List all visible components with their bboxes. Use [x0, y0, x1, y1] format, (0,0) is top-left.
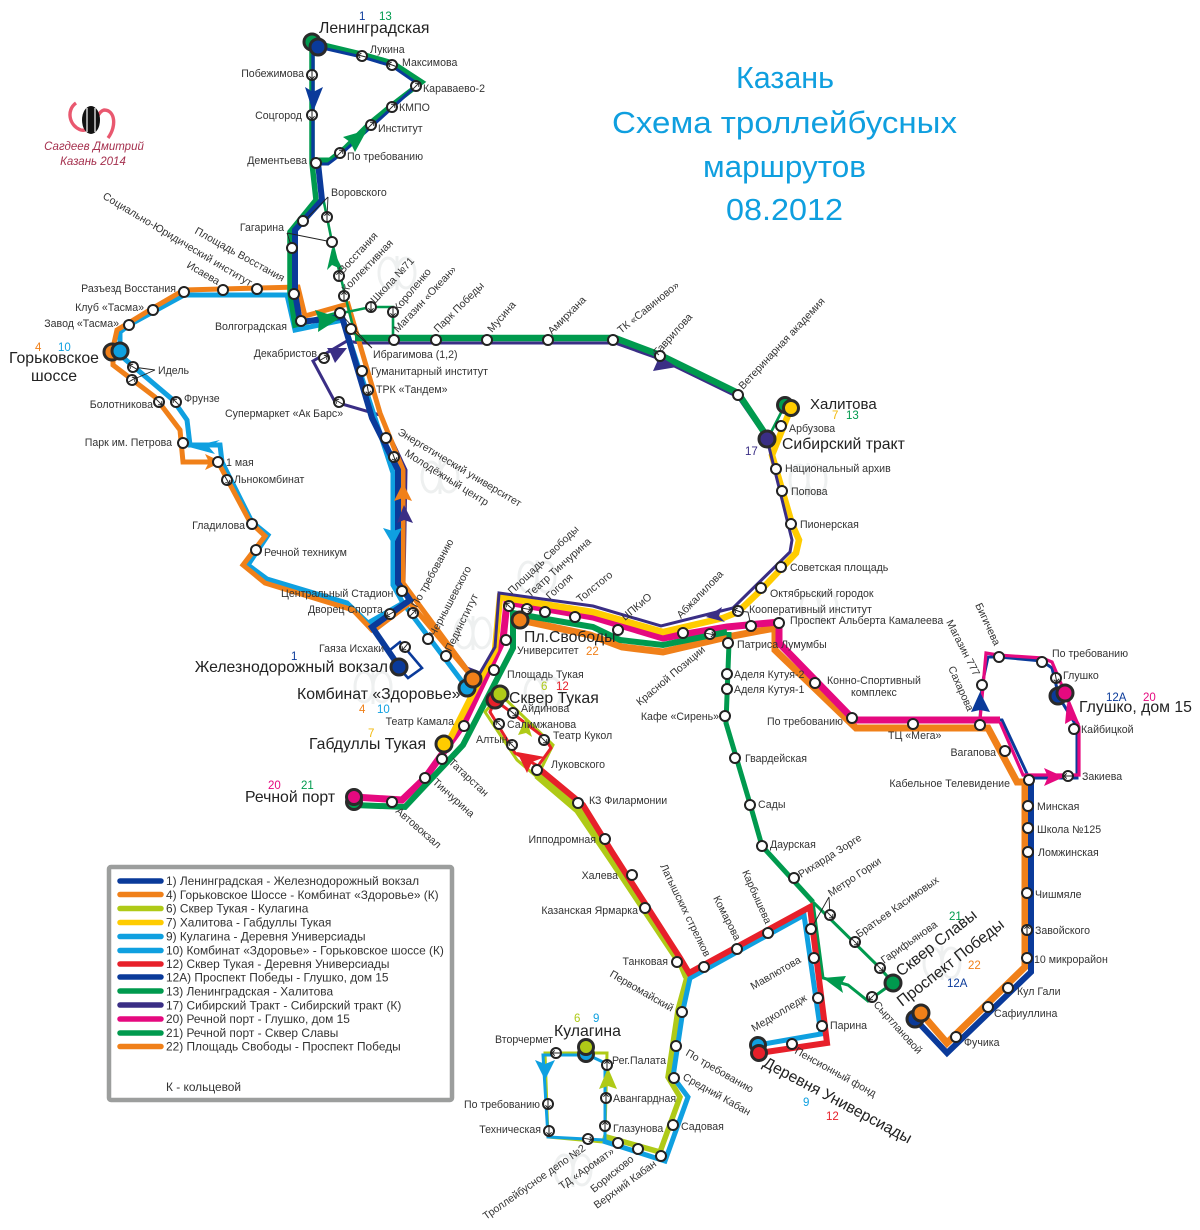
- station labels: north: Площадь Восстания: [193, 225, 286, 284]
- station labels: south: Троллейбусное депо №2: [481, 1142, 588, 1222]
- station labels: south: Глазунова: [613, 1123, 663, 1135]
- station labels: centre: Латышских стрелков: [657, 862, 713, 959]
- station labels: north: Школа №71: [368, 255, 417, 306]
- legend entries: 6) Сквер Тукая - Кулагина: [166, 902, 309, 916]
- station labels: east: Арбузова: [789, 423, 835, 435]
- station labels: south: Рег.Палата: [612, 1055, 666, 1067]
- station labels: east: Пионерская: [800, 519, 859, 531]
- arrow: route 12: [517, 752, 545, 773]
- station labels: north: Дементьева: [247, 155, 307, 167]
- station labels: east: Проспект Альберта Камалеева: [790, 615, 943, 627]
- legend entries: 12А) Проспект Победы - Глушко, дом 15: [166, 970, 389, 984]
- route 20: Речной порт - Глушко: [354, 602, 1079, 800]
- route 17: Сибирский тракт ring: [313, 341, 792, 673]
- route 7: Халитова - Габдуллы Тукая: [444, 408, 799, 744]
- station labels: north: Соцгород: [255, 110, 302, 122]
- terminus label: Халитова: Халитова: [810, 396, 877, 413]
- route 12A: Проспект Победы - Глушко: [915, 657, 1077, 1053]
- station labels: north: Побежимова: [241, 68, 304, 80]
- station labels: east: Сахарова: [945, 664, 976, 713]
- terminus label: Кулагина: 9: [593, 1013, 599, 1025]
- terminus label: Глушко, дом 15: 12А: [1106, 692, 1127, 704]
- station labels: north: [44, 44, 828, 420]
- terminus label: Глушко, дом 15: Глушко, дом 15: [1079, 699, 1192, 716]
- station labels: south-east: Парина: [830, 1020, 867, 1032]
- station labels: east: Минская: [1037, 801, 1079, 813]
- station labels: west: Болотникова: [90, 399, 153, 411]
- station labels: centre: Ипподромная: [529, 834, 596, 846]
- station labels: east: Кул Гали: [1017, 986, 1061, 998]
- station labels: east: Бигичева: [972, 601, 1002, 648]
- station labels: east: Кооперативный институт: [749, 604, 872, 616]
- terminus label: Горьковское шоссе: [9, 342, 99, 385]
- station labels: west: Пединститут: [443, 592, 481, 653]
- route 10: Комбинат Здоровье - Горьковское шоссе: [120, 295, 467, 688]
- terminus label: Пл.Свободы: Пл.Свободы: [524, 629, 615, 646]
- terminus label: Кулагина: [554, 1013, 621, 1040]
- station labels: centre: Театр Тинчурина: [524, 536, 594, 600]
- station labels: east: Школа №125: [1037, 824, 1101, 836]
- station labels: north: Ветеринарная академия: [736, 296, 828, 392]
- arrow: route 17 west: [706, 607, 725, 622]
- station labels: north: Максимова: [402, 57, 457, 69]
- station labels: east: Национальный архив: [785, 463, 891, 475]
- terminus label: Ленинградская: 1: [359, 11, 365, 23]
- station labels: east: Октябрьский городок: [770, 588, 874, 600]
- plain stops: [124, 158, 1079, 1161]
- terminus label: Железнодорожный вокзал: 1: [291, 651, 297, 663]
- legend entries: 10) Комбинат «Здоровье» - Горьковское шоссе (К): [166, 944, 444, 958]
- station labels: west: 1 мая: [226, 457, 254, 469]
- route 6: Сквер Тукая - Кулагина: [485, 694, 687, 1152]
- arrow: route 21: [823, 976, 846, 993]
- arrow: route 1 south: [305, 87, 323, 112]
- terminus label: Сквер Славы: Сквер Славы: [893, 907, 980, 980]
- station labels: centre: Площадь Свободы: [506, 523, 581, 597]
- station labels: west: Энергетический университет: [395, 426, 523, 510]
- station labels: west: Льнокомбинат: [234, 474, 305, 486]
- terminus label: Проспект Победы: 22: [968, 960, 981, 972]
- legend entries: 9) Кулагина - Деревня Универсиады: [166, 930, 366, 944]
- station labels: north: Исаева: [184, 259, 222, 288]
- station labels: east: Закиева: [1082, 771, 1122, 783]
- station labels: east: 10 микрорайон: [1034, 954, 1108, 966]
- terminus label: Сквер Тукая: 6: [541, 681, 547, 693]
- station labels: centre: Луковского: [551, 759, 605, 771]
- station labels: east: Чишмяле: [1035, 889, 1082, 901]
- station labels: east: Аделя Кутуя-2: [734, 669, 805, 681]
- station labels: north: Завод «Тасма»: [44, 318, 119, 330]
- station labels: south: Первомайский: [608, 968, 676, 1014]
- station labels: north: Институт: [378, 123, 423, 135]
- station labels: east: Попова: [791, 486, 828, 498]
- terminus label: Сквер Славы: 21: [949, 911, 962, 923]
- arrow: route 4 south: [394, 483, 412, 501]
- station labels: east: Вагапова: [950, 747, 996, 759]
- legend entries: К - кольцевой: [166, 1080, 241, 1094]
- title: Казань: [736, 60, 834, 95]
- terminus markers: [104, 34, 1073, 1062]
- terminus label: Проспект Победы: 12А: [947, 978, 968, 990]
- terminus label: Пл.Свободы: [524, 629, 615, 658]
- terminus label: Пл.Свободы: 22: [586, 646, 599, 658]
- terminus label: Габдуллы Тукая: 7: [368, 728, 374, 740]
- station labels: east: Патриса Лумумбы: [737, 639, 827, 651]
- route 4: Горьковское шоссе - Комбинат Здоровье: [112, 287, 473, 678]
- terminus label: Ленинградская: [319, 11, 429, 37]
- station labels: north: Супермаркет «Ак Барс»: [225, 408, 343, 420]
- terminus label: Речной порт: [245, 780, 335, 806]
- station labels: centre: Абжалилова: [675, 568, 726, 621]
- station labels: west: Центральный Стадион: [281, 588, 394, 600]
- station labels: south: Вторчермет: [495, 1034, 553, 1046]
- station labels: north: Гагарина: [240, 222, 284, 234]
- station labels: east: Кабельное Телевидение: [889, 778, 1010, 790]
- watermarks: [355, 256, 960, 1187]
- station labels: south-east: Пенсионный фонд: [793, 1045, 878, 1100]
- route 9: Кулагина - Деревня Универсиады: [543, 915, 821, 1161]
- terminus label: Железнодорожный вокзал: Железнодорожный вокзал: [195, 659, 388, 676]
- station labels: west: Чернышевского: [427, 564, 474, 638]
- station labels: north: По требованию: [347, 151, 423, 163]
- station labels: centre: Карбышева: [739, 868, 774, 926]
- terminus label: Ленинградская: 13: [379, 11, 392, 23]
- arrow: route 20 north: [1065, 703, 1080, 724]
- title: [612, 60, 958, 227]
- terminus label: Горьковское шоссе: 4: [35, 342, 42, 354]
- station labels: west: [85, 365, 523, 851]
- terminus label: Халитова: [810, 396, 877, 422]
- arrow: route 6: [518, 718, 532, 737]
- station labels: west: По требованию: [409, 537, 457, 609]
- terminus label: Деревня Универсиады: Деревня Универсиады: [760, 1055, 915, 1147]
- station labels: south-east: Медколледж: [749, 992, 810, 1035]
- arrow: route 17 north: [397, 505, 413, 523]
- station labels: east: ТЦ «Мега»: [888, 730, 942, 742]
- station labels: centre: КЗ Филармонии: [589, 795, 667, 807]
- station labels: north: Коллективная: [340, 237, 396, 295]
- station labels: east: Сафиуллина: [994, 1008, 1057, 1020]
- station labels: south: Борисково: [588, 1153, 636, 1195]
- station labels: north: Ибрагимова (1,2): [373, 349, 458, 361]
- terminus label: Железнодорожный вокзал: [195, 651, 388, 676]
- station labels: north: Караваево-2: [423, 83, 485, 95]
- arrow: route 6 north: [599, 1068, 617, 1089]
- legend entries: 1) Ленинградская - Железнодорожный вокзал: [166, 874, 419, 888]
- legend panel: [109, 867, 452, 1100]
- legend entries: 13) Ленинградская - Халитова: [166, 984, 333, 998]
- direction arrows: [189, 87, 1080, 1089]
- station labels: west: Тинчурина: [430, 776, 477, 820]
- arrow: route 12A north: [971, 692, 990, 712]
- terminus label: Речной порт: 21: [301, 780, 314, 792]
- station labels: south-east: [748, 832, 942, 1100]
- legend entries: 21) Речной порт - Сквер Славы: [166, 1026, 338, 1040]
- terminus label: Горьковское шоссе: 10: [58, 342, 71, 354]
- legend entries: 20) Речной порт - Глушко, дом 15: [166, 1012, 350, 1026]
- logo and author signature: [44, 103, 144, 168]
- terminus label: Комбинат Здоровье: Комбинат «Здоровье»: [297, 686, 461, 703]
- legend entries: 22) Площадь Свободы - Проспект Победы: [166, 1040, 401, 1054]
- station labels: centre: Казанская Ярмарка: [541, 905, 638, 917]
- terminus label: Габдуллы Тукая: Габдуллы Тукая: [309, 736, 426, 753]
- station labels: west: Гладилова: [192, 520, 245, 532]
- station labels: south: Авангардная: [613, 1093, 676, 1105]
- station labels: east: [641, 423, 1134, 1049]
- station labels: east: Фучика: [964, 1037, 1000, 1049]
- terminus label: Деревня Универсиады: 12: [826, 1111, 839, 1123]
- station labels: north: Амирхана: [546, 294, 589, 337]
- title: Схема троллейбусных: [612, 105, 958, 140]
- station labels: west: Речной техникум: [264, 547, 347, 559]
- legend entries: 12) Сквер Тукая - Деревня Универсиады: [166, 957, 389, 971]
- station labels: south-east: Гарифьянова: [879, 919, 940, 966]
- arrow: route 13 north: [327, 248, 343, 270]
- station labels: north: Декабристов: [254, 348, 317, 360]
- station labels: south: [464, 968, 755, 1222]
- arrow: route 10 west: [189, 440, 220, 454]
- station labels: west: Парк им. Петрова: [85, 437, 172, 449]
- arrow: route 17 east: [653, 352, 677, 371]
- station labels: north: Парк Победы: [432, 280, 487, 335]
- station labels: west: Автовокзал: [393, 805, 443, 851]
- station labels: west: Фрунзе: [184, 393, 220, 405]
- station labels: west: Гаяза Исхаки: [319, 643, 384, 655]
- station labels: south: По требованию: [464, 1099, 540, 1111]
- station labels: centre: Площадь Тукая: [507, 669, 584, 681]
- route 1: Ленинградская - Железнодорожный вокзал: [295, 47, 422, 678]
- station labels: east: Гвардейская: [745, 753, 807, 765]
- station labels: east: комплекс: [851, 687, 897, 699]
- terminus label: Проспект Победы: Проспект Победы: [894, 916, 1008, 1010]
- station labels: centre: Гоголя: [544, 571, 576, 602]
- terminus label: Горьковское шоссе: шоссе: [31, 368, 77, 385]
- station labels: west: Молодёжный центр: [402, 447, 491, 509]
- terminus label: Речной порт: 20: [268, 780, 281, 792]
- terminus label: Сибирский тракт: Сибирский тракт: [782, 436, 905, 453]
- station labels: north: Социально-Юридический институт: [100, 190, 254, 289]
- station labels: south-east: Метро Горки: [826, 855, 884, 899]
- station labels: east: Советская площадь: [790, 562, 889, 574]
- terminus label: Сибирский тракт: 17: [745, 446, 758, 458]
- station labels: south: Садовая: [681, 1121, 724, 1133]
- station labels: west: Дворец Спорта: [308, 604, 383, 616]
- station labels: east: Конно-Спортивный: [827, 675, 921, 687]
- station labels: south: Верхний Кабан: [592, 1158, 659, 1211]
- station labels: east: Завойского: [1035, 925, 1090, 937]
- terminus label: Комбинат Здоровье: 10: [377, 704, 390, 716]
- arrow: route 10 south: [383, 528, 402, 545]
- terminus label: Сибирский тракт: [745, 436, 905, 458]
- station labels: north: Магазин «Океан»: [391, 264, 459, 335]
- terminus label: Комбинат Здоровье: [297, 686, 461, 716]
- terminus label: Кулагина: 6: [574, 1013, 580, 1025]
- station labels: north: Гуманитарный институт: [371, 366, 488, 378]
- terminus label: Комбинат Здоровье: 4: [359, 704, 366, 716]
- station labels: centre: Толстого: [574, 569, 615, 605]
- station labels: east: Глушко: [1063, 670, 1099, 682]
- arrow: route 17: [327, 348, 347, 363]
- title: маршрутов: [703, 149, 866, 184]
- terminus label: Ленинградская: Ленинградская: [319, 20, 429, 37]
- arrow: route 13 north-east: [343, 130, 367, 152]
- stop leader lines: [132, 197, 830, 929]
- terminus label: Халитова: 13: [846, 410, 859, 422]
- station labels: west: Театр Камала: [386, 716, 454, 728]
- route 21: Речной порт - Сквер Славы: [354, 613, 893, 1001]
- station labels: centre: [476, 523, 774, 968]
- one-way stops with direction marks: [125, 50, 1073, 1145]
- arrow: route 20 east: [1044, 768, 1064, 786]
- terminus label: Горьковское шоссе: Горьковское: [9, 350, 99, 367]
- route 22: Площадь Свободы - Проспект Победы: [520, 620, 1025, 1043]
- station labels: centre: Комарова: [710, 894, 743, 943]
- legend swatches: [120, 881, 161, 1046]
- legend entries: 17) Сибирский Тракт - Сибирский тракт (К): [166, 998, 401, 1012]
- station labels: east: По требованию: [1052, 648, 1128, 660]
- station labels: centre: Танковая: [622, 956, 668, 968]
- station labels: centre: Красной Позиции: [634, 644, 708, 708]
- terminus label: Халитова: 7: [832, 410, 838, 422]
- station labels: east: Кайбицкой: [1081, 724, 1134, 736]
- station labels: south: По требованию: [684, 1047, 755, 1096]
- terminus label: Сквер Тукая: 12: [556, 681, 569, 693]
- arrow: route 13 east at Волгоградская: [315, 310, 340, 332]
- station labels: east: Магазин 777: [943, 618, 982, 678]
- station labels: centre: ЦПКиО: [619, 591, 654, 623]
- station labels: south-east: Сыртлановой: [871, 999, 924, 1057]
- station labels: east: По требованию: [767, 716, 843, 728]
- station labels: south: ТД «Аромат»: [557, 1145, 617, 1192]
- station labels: north: Разъезд Восстания: [81, 283, 176, 295]
- station labels: north: Короленко: [391, 266, 434, 314]
- route 13: Ленинградская - Халитова: [290, 42, 785, 438]
- station labels: south: Техническая: [479, 1124, 541, 1136]
- route 12: Сквер Тукая - Деревня Универсиады: [490, 700, 827, 1053]
- terminus label: Габдуллы Тукая: [309, 728, 426, 753]
- station labels: south: Средний Кабан: [681, 1071, 753, 1118]
- terminus label: Деревня Универсиады: 9: [803, 1097, 809, 1109]
- station labels: north: Гаврилова: [651, 311, 695, 358]
- legend entries: 4) Горьковское Шоссе - Комбинат «Здоровье» (К): [166, 888, 439, 902]
- station labels: south-east: Мавлютова: [748, 954, 803, 993]
- station labels: north: Лукина: [370, 44, 405, 56]
- station labels: north: Клуб «Тасма»: [75, 302, 144, 314]
- station labels: north: ТК «Савиново»: [615, 279, 682, 336]
- station labels: north: Волгоградская: [215, 321, 287, 333]
- station labels: north: Мусина: [485, 299, 519, 335]
- station labels: east: Аделя Кутуя-1: [734, 684, 805, 696]
- station labels: north: КМПО: [399, 102, 430, 114]
- terminus label: Глушко, дом 15: 20: [1143, 692, 1156, 704]
- station labels: south-east: Рихарда Зорге: [796, 832, 864, 881]
- station labels: west: Татарстан: [446, 756, 491, 799]
- terminus label: Сквер Тукая: Сквер Тукая: [509, 690, 599, 707]
- legend entries: 7) Халитова - Габдуллы Тукая: [166, 916, 331, 930]
- station labels: north: Восстания: [336, 230, 380, 276]
- station labels: north: Воровского: [331, 187, 387, 199]
- station labels: west: Идель: [158, 365, 190, 377]
- station labels: south-east: Братьев Касимовых: [854, 874, 942, 940]
- station labels: centre: Халева: [582, 870, 618, 882]
- station labels: east: Кафе «Сирень»: [641, 711, 719, 723]
- station labels: centre: Алтын: [476, 734, 508, 746]
- station labels: north: ТРК «Тандем»: [376, 384, 448, 396]
- logo and author signature: Казань 2014: [60, 156, 126, 168]
- terminus label: Кулагина: Кулагина: [554, 1023, 621, 1040]
- station labels: east: Сады: [758, 799, 785, 811]
- station labels: centre: Салимжанова: [507, 719, 576, 731]
- station labels: east: Даурская: [770, 839, 816, 851]
- arrow: route 9 south: [535, 1060, 555, 1080]
- terminus label: Сквер Тукая: [509, 681, 599, 707]
- arrow: route 4 east: [205, 454, 222, 470]
- station labels: centre: Айдинова: [521, 703, 569, 715]
- title: 08.2012: [726, 192, 843, 227]
- legend entries: [166, 874, 444, 1094]
- terminus label: Речной порт: Речной порт: [245, 789, 335, 806]
- station labels: centre: Театр Кукол: [553, 730, 612, 742]
- station labels: east: Ломжинская: [1038, 847, 1099, 859]
- logo and author signature: Сагдеев Дмитрий: [44, 141, 144, 153]
- station labels: centre: Университет: [517, 645, 579, 657]
